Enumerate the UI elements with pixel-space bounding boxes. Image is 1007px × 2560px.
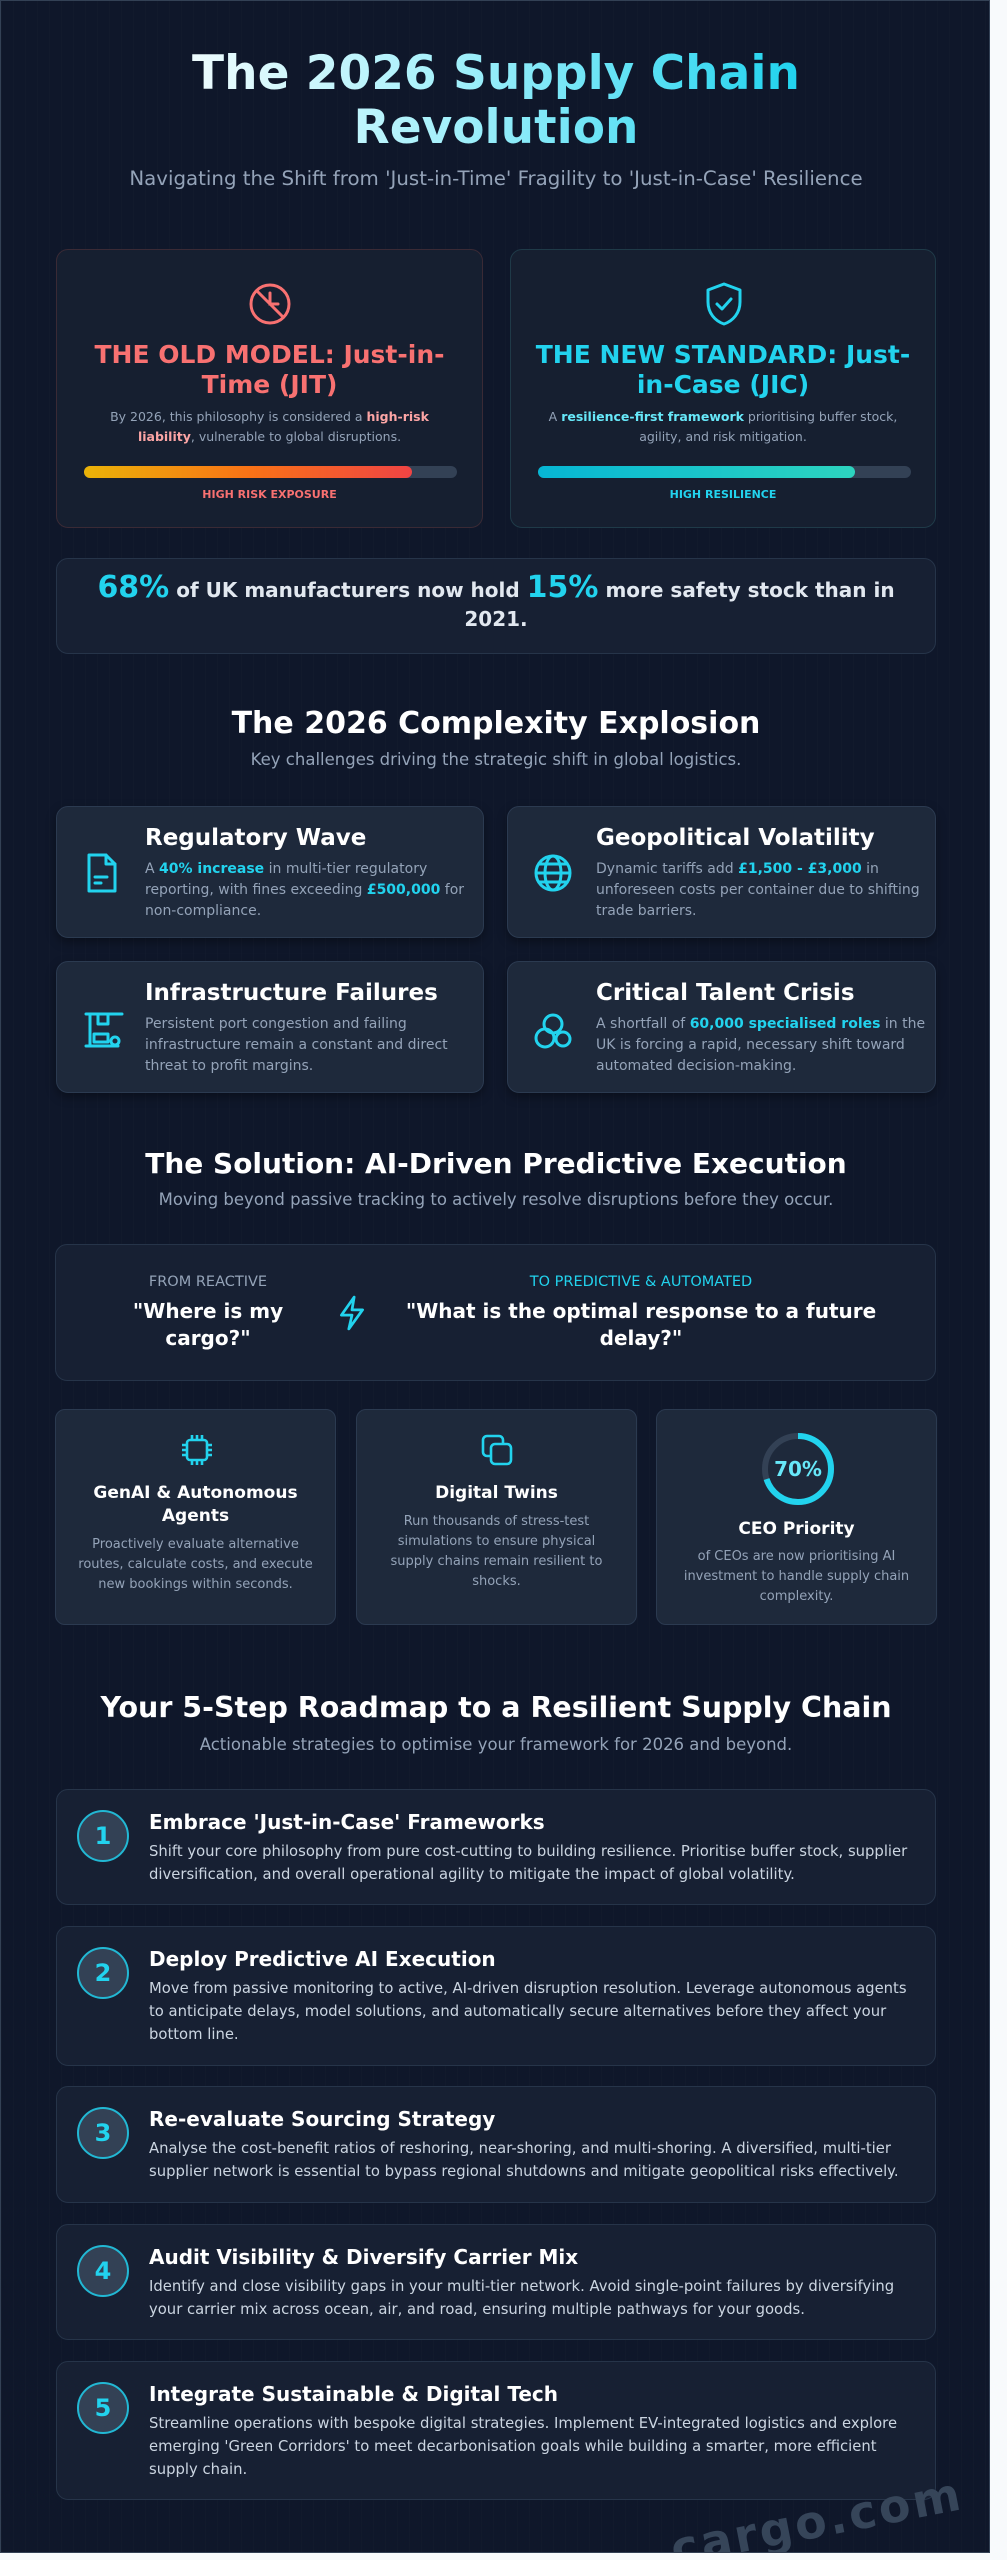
subheading: Moving beyond passive tracking to actively resolve disruptions before they occur. (159, 1190, 833, 1209)
icon: copy (482, 1434, 512, 1466)
icon: lightning (340, 1296, 364, 1330)
step 2 (56, 1926, 936, 2066)
panel: regulatory wave (56, 806, 484, 938)
step 4: Audit Visibility & Diversify Carrier Mix (149, 2245, 578, 2269)
step 1 (56, 1789, 936, 1905)
icon: people (534, 1014, 572, 1048)
callout: stats (56, 558, 936, 654)
title: Revolution (354, 100, 638, 155)
panel: new standard JIC (510, 249, 936, 528)
panel: old model JIT (56, 249, 483, 528)
text: of CEOs are now prioritising AI investment to handle supply chain complexity. (684, 1549, 909, 1604)
panel: reactive vs predictive (55, 1244, 936, 1381)
text: Persistent port congestion and failing infrastructure remain a constant and direct threat to profit margins. (145, 1016, 448, 1074)
step 1: 1 (95, 1822, 111, 1850)
description: By 2026, this philosophy is considered a high-risk liability, vulnerable to global disruptions. (110, 409, 429, 444)
icon: port crane (84, 1012, 124, 1048)
resilience bar (538, 466, 911, 478)
title: Critical Talent Crisis (596, 980, 855, 1006)
title: GenAI & Autonomous Agents (93, 1483, 298, 1526)
icon: clock slashed (250, 284, 290, 324)
title: Geopolitical Volatility (596, 825, 875, 851)
step 3 (56, 2086, 936, 2203)
panel: digital twins (356, 1409, 637, 1625)
from reactive: "Where is my cargo?" (133, 1299, 283, 1350)
from reactive: FROM REACTIVE (149, 1274, 267, 1290)
icon: shield check (706, 282, 742, 326)
step 4: Identify and close visibility gaps in your multi-tier network. Avoid single-point failures by diversifying your carrier mix across ocean, air, and road, ensuring multiple pathways for your goods. (149, 2278, 894, 2318)
subtitle: Navigating the Shift from 'Just-in-Time' Fragility to 'Just-in-Case' Resilience (129, 167, 863, 190)
title: Infrastructure Failures (145, 980, 438, 1006)
text: Dynamic tariffs add £1,500 - £3,000 in unforeseen costs per container due to shifting trade barriers. (596, 861, 920, 919)
step 5: Integrate Sustainable & Digital Tech (149, 2382, 558, 2406)
step 2: 2 (95, 1959, 111, 1987)
title: CEO Priority (738, 1519, 855, 1539)
step 4 (56, 2224, 936, 2340)
heading: THE OLD MODEL: Just-in-Time (JIT) (94, 340, 445, 399)
step 5: Streamline operations with bespoke digital strategies. Implement EV-integrated logistics and explore emerging 'Green Corridors' to meet decarbonisation goals while building a smarter, more efficient supply chain. (149, 2415, 897, 2478)
chart: 70% ring (762, 1433, 834, 1505)
panel: talent crisis (507, 961, 936, 1093)
to predictive: "What is the optimal response to a future delay?" (406, 1299, 876, 1350)
icon: globe (534, 854, 572, 892)
heading: solution: The Solution: AI-Driven Predictive Execution (145, 1147, 847, 1180)
bar label: HIGH RISK EXPOSURE (202, 488, 337, 501)
text: Proactively evaluate alternative routes, calculate costs, and execute new bookings within seconds. (78, 1537, 313, 1592)
chart: 70% ring: 70% (774, 1457, 822, 1481)
text: Run thousands of stress-test simulations to ensure physical supply chains remain resilient to shocks. (391, 1514, 602, 1589)
bar label: HIGH RESILIENCE (670, 488, 776, 501)
icon: document (88, 854, 116, 892)
step 1: Shift your core philosophy from pure cost-cutting to building resilience. Prioritise buffer stock, supplier diversification, and overall operational agility to mitigate the impact of global volatility. (149, 1843, 907, 1883)
panel: genai agents (55, 1409, 336, 1625)
subheading: Key challenges driving the strategic shift in global logistics. (251, 750, 741, 769)
panel: infrastructure failures (56, 961, 484, 1093)
to predictive: TO PREDICTIVE & AUTOMATED (530, 1274, 752, 1290)
step 3: Re-evaluate Sourcing Strategy (149, 2107, 495, 2131)
title: The 2026 Supply Chain (192, 46, 800, 101)
step 1: Embrace 'Just-in-Case' Frameworks (149, 1810, 545, 1834)
panel: ceo priority (656, 1409, 937, 1625)
risk bar (84, 466, 457, 478)
panel: geopolitical volatility (507, 806, 936, 938)
icon: chip (182, 1435, 212, 1465)
callout: stats: 68% of UK manufacturers now hold 15% more safety stock than in 2021. (97, 570, 895, 631)
step 5: 5 (95, 2394, 111, 2422)
step 5 (56, 2361, 936, 2500)
to predictive (406, 1274, 876, 1350)
text: A shortfall of 60,000 specialised roles in the UK is forcing a rapid, necessary shift toward automated decision-making. (596, 1016, 925, 1074)
heading: THE NEW STANDARD: Just-in-Case (JIC) (536, 340, 910, 399)
from reactive (133, 1274, 283, 1350)
text: A 40% increase in multi-tier regulatory reporting, with fines exceeding £500,000 for non-compliance. (145, 861, 464, 919)
step 3: Analyse the cost-benefit ratios of reshoring, near-shoring, and multi-shoring. A diversified, multi-tier supplier network is essential to bypass regional shutdowns and mitigate geopolitical risks effectively. (149, 2140, 899, 2180)
heading: roadmap: Your 5-Step Roadmap to a Resilient Supply Chain (100, 1691, 892, 1724)
title (1, 47, 991, 155)
heading: complexity: The 2026 Complexity Explosion (232, 706, 760, 741)
description: A resilience-first framework prioritising buffer stock, agility, and risk mitigation. (549, 409, 897, 444)
title: Regulatory Wave (145, 825, 366, 851)
step 3: 3 (95, 2119, 111, 2147)
subheading: Actionable strategies to optimise your framework for 2026 and beyond. (200, 1735, 792, 1754)
step 4: 4 (95, 2257, 111, 2285)
step 2: Deploy Predictive AI Execution (149, 1947, 496, 1971)
step 2: Move from passive monitoring to active, AI-driven disruption resolution. Leverage autonomous agents to anticipate delays, model solutions, and automatically secure alternatives before they affect your bottom line. (149, 1980, 907, 2043)
title: Digital Twins (435, 1483, 558, 1503)
